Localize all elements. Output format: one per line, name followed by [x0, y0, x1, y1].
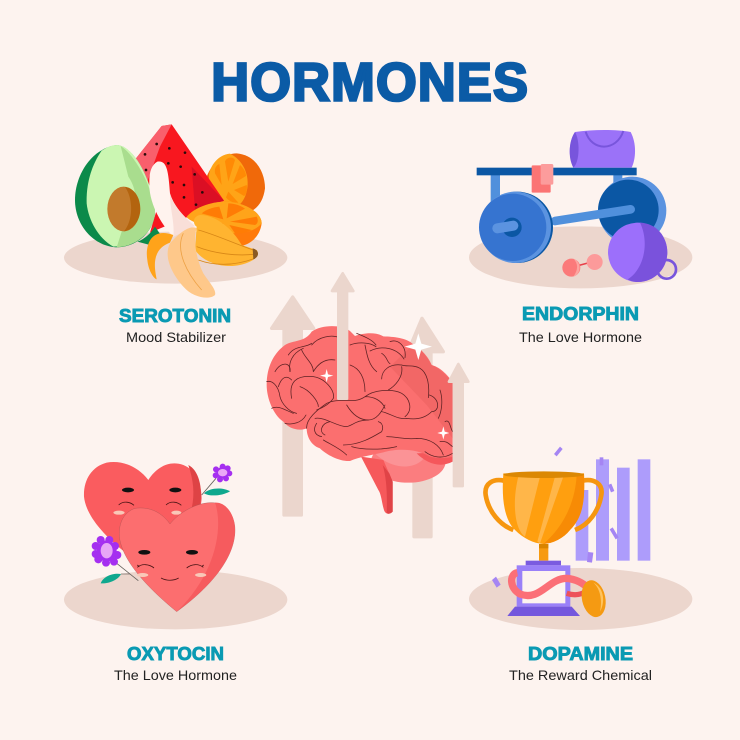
illustration: fruit [64, 124, 287, 298]
heading: oxytocin: OXYTOCIN [127, 643, 224, 664]
subtitle: the reward chemical: The Reward Chemical [509, 667, 652, 683]
illustration: gym equipment [469, 130, 692, 288]
panel: serotonin [64, 124, 287, 345]
panel: brain with arrows [267, 273, 468, 537]
brain wrinkles [267, 333, 453, 457]
brain shading [390, 344, 453, 438]
heading: serotonin: SEROTONIN [119, 305, 231, 326]
panel: dopamine [469, 447, 692, 683]
heading: endorphin: ENDORPHIN [522, 303, 639, 324]
title: HORMONES [211, 53, 529, 113]
arrows in front of brain [332, 273, 468, 486]
illustration: trophy and bar chart [469, 447, 692, 630]
panel: endorphin [469, 130, 692, 345]
illustration: hearts and flowers [64, 462, 287, 629]
sparkles [320, 333, 449, 440]
subtitle: the love hormone: The Love Hormone [114, 667, 237, 683]
panel: oxytocin [64, 462, 287, 683]
arrows behind brain [272, 297, 443, 537]
cerebrum [267, 326, 453, 461]
subtitle: the love hormone: The Love Hormone [519, 329, 642, 345]
subtitle: mood stabilizer: Mood Stabilizer [126, 329, 226, 345]
cerebellum and brain stem [361, 441, 453, 514]
heading: dopamine: DOPAMINE [528, 643, 633, 664]
